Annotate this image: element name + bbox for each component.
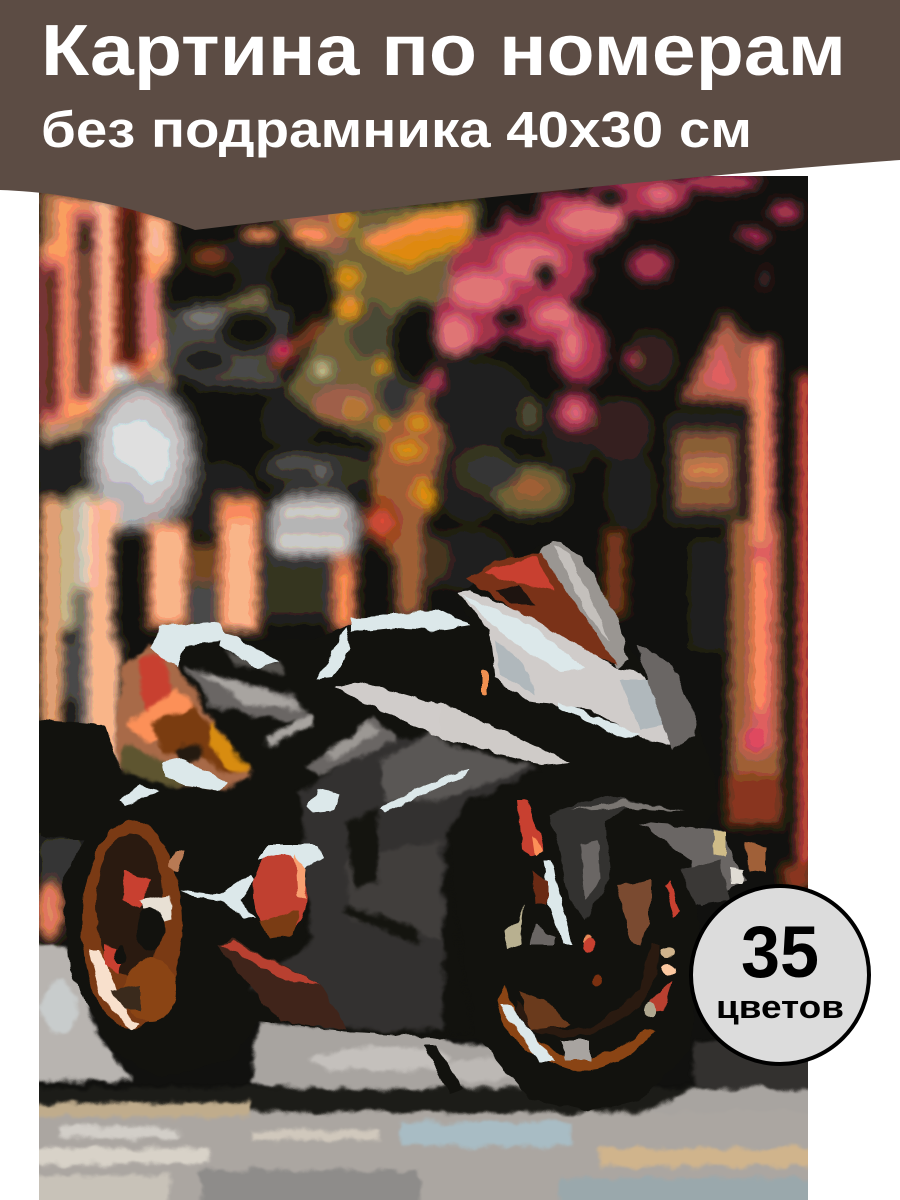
badge: 35 colours (691, 886, 869, 1064)
subtitle: без подрамника 40х30 см (41, 101, 752, 158)
foliage: peach highlights (242, 212, 470, 309)
painting: motorcycle paint-by-numbers picture (20, 160, 830, 1200)
motorcycle (39, 539, 767, 1112)
background: lantern, red pillar (36, 312, 812, 940)
motorcycle: fairing and windscreen (458, 539, 697, 750)
motorcycle: grey body panels (185, 650, 540, 1033)
badge: 35 colours: 35 (741, 912, 819, 993)
foliage: orange leaves (334, 206, 470, 512)
background: dark grey band and lamp halo (38, 380, 401, 566)
background: blurred street, foliage and lamps (39, 176, 808, 946)
motorcycle: red exhaust cover and lower wedge (217, 853, 347, 1030)
motorcycle: white highlights (120, 610, 570, 920)
motorcycle: rear wheel rim (82, 821, 185, 1030)
badge: 35 colours: цветов (716, 989, 844, 1025)
title: Картина по номерам (41, 11, 846, 91)
motorcycle: black silhouette (39, 540, 720, 1112)
background: wall with peach stripes (38, 190, 175, 445)
background: mottled grey mid-tones (185, 334, 724, 650)
foliage: pink blossom mass (424, 172, 800, 432)
ground: pavement (20, 945, 830, 1200)
foliage: olive and brown mass (158, 195, 650, 560)
foliage: dark gaps in blossom (496, 188, 765, 328)
foliage: pink highlights (435, 185, 674, 422)
motorcycle: tail section (115, 645, 250, 790)
background: glowing pillars (40, 490, 625, 770)
motorcycle: front wheel and fork (423, 795, 767, 1093)
header banner (0, 0, 900, 230)
